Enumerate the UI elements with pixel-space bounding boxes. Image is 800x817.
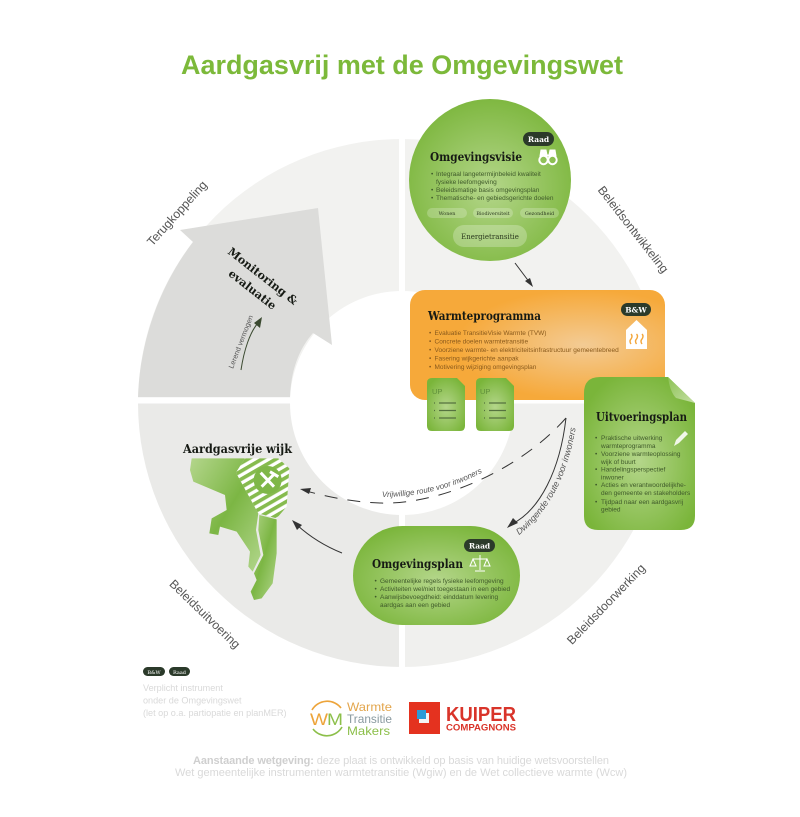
map: aardgasvrije wijk [190,458,289,600]
text: uitvoeringsplan bullets: Voorziene warmteoplossing [601,451,681,458]
arrow: lerend vermogen: Lerend vermogen [226,314,255,370]
text: omgevingsplan bullets: Activiteiten wel/niet toegestaan in een gebied [380,586,510,593]
logo: warmte transitie makers: W [310,710,328,729]
text: omgevingsplan bullets: • [374,578,378,585]
text: warmteprogramma bullets: • [429,338,432,346]
tag: gezondheid [520,208,559,218]
cycle ring [130,130,675,675]
text: uitvoeringsplan bullets: inwoner [601,474,625,482]
text: uitvoeringsplan bullets: • [595,435,598,442]
logo: kuiper compagnons: COMPAGNONS [446,722,516,732]
icon: document UP 1 [427,378,465,431]
badge: raad: Raad [469,541,491,550]
text: warmteprogramma bullets: • [429,347,432,354]
text: warmteprogramma bullets: Evaluatie TransitieVisie Warmte (TVW) [434,330,546,337]
badge: raad legend [169,667,190,676]
text: legend description [143,683,287,718]
label: beleidsdoorwerking: Beleidsdoorwerking [564,561,648,647]
text: omgevingsplan bullets: aardgas aan een gebied [380,602,451,609]
arrow: plan naar wijk [292,520,342,553]
text: omgevingsplan bullets: • [374,594,378,601]
panel: omgevingsvisie [409,99,571,261]
text: aanstaande wetgeving: Wet gemeentelijke instrumenten warmtetransitie (Wgiw) en de Wet collectieve warmte (Wcw) [175,767,627,779]
text: aanstaande wetgeving [175,755,627,779]
text: omgevingsvisie bullets: Thematische- en gebiedsgerichte doelen [436,195,554,202]
heading: omgevingsvisie: Omgevingsvisie [430,149,522,164]
text: warmteprogramma bullets: • [429,330,432,337]
text: warmteprogramma bullets: • [429,364,432,371]
badge: raad legend: Raad [173,670,187,676]
text: omgevingsvisie bullets: • [431,195,434,202]
icon: scales [470,555,490,571]
tag: biodiversiteit: Biodiversiteit [476,211,510,217]
logo: kuiper compagnons [409,702,517,734]
text: warmteprogramma bullets: Fasering wijkgerichte aanpak [434,356,519,362]
text: omgevingsplan bullets: Aanwijsbevoegdheid: einddatum levering [380,594,499,601]
heading: aardgasvrije wijk: Aardgasvrije wijk [182,441,292,456]
badge: raad [464,539,495,552]
badge: b&w legend: B&W [147,670,161,676]
panel: uitvoeringsplan [584,377,695,530]
title: Aardgasvrij met de Omgevingswet [181,50,623,80]
logo: warmte transitie makers: M [327,710,343,729]
icon: binoculars [539,150,557,164]
icon: document UP 2: UP [480,387,490,396]
text: omgevingsplan bullets: • [374,586,378,593]
logo: warmte transitie makers [310,700,392,738]
heading: monitoring en evaluatie: Monitoring & [225,244,301,308]
text: uitvoeringsplan bullets: warmteprogramma [600,443,656,450]
badge: b&w [621,303,651,316]
tag: biodiversiteit [473,208,513,218]
tag: wonen [427,208,467,218]
arrow: vrijwillige route [300,418,566,504]
arrow: monitoring en evaluatie [138,208,332,397]
text: warmteprogramma bullets: • [429,356,432,362]
text: omgevingsvisie bullets [431,171,554,202]
text: warmteprogramma bullets: Motivering wijziging omgevingsplan [434,364,537,371]
text: omgevingsplan bullets: Gemeentelijke regels fysieke leefomgeving [380,578,504,585]
badge: raad [523,132,554,146]
text: uitvoeringsplan bullets: • [595,482,598,489]
logo: warmte transitie makers: Makers [347,724,390,738]
heading: monitoring en evaluatie: evaluatie [226,266,279,313]
heading: warmteprogramma: Warmteprogramma [427,308,541,323]
text: uitvoeringsplan bullets [595,435,691,514]
text: uitvoeringsplan bullets: • [595,466,598,474]
arrow: vrijwillige route: Vrijwillige route voor inwoners [382,469,482,498]
panel: warmteprogramma [410,290,665,400]
text: omgevingsplan bullets [374,578,510,609]
label: beleidsuitvoering: Beleidsuitvoering [167,577,243,651]
arrow: dwingende route: Dwingende route voor inwoners [516,428,576,535]
heading: omgevingsplan: Omgevingsplan [372,556,463,571]
text: uitvoeringsplan bullets: Acties en verantwoordelijkhe- [601,482,686,489]
text: uitvoeringsplan bullets: Tijdpad naar een aardgasvrij [601,499,683,506]
panel: omgevingsplan [353,526,520,625]
text: omgevingsvisie bullets: • [431,187,434,194]
arrow: visie naar warmteprogramma [515,263,533,287]
text: uitvoeringsplan bullets: Praktische uitwerking [601,435,663,442]
icon: pencil [674,431,688,446]
label: beleidsontwikkeling: Beleidsontwikkeling [595,183,671,276]
text: uitvoeringsplan bullets: Handelingsperspectief [601,466,666,474]
legend [143,667,287,718]
text: warmteprogramma bullets: Voorziene warmte- en elektriciteitsinfrastructuur gemeentebreed [434,347,619,354]
text: omgevingsvisie bullets: fysieke leefomgeving [436,179,497,186]
logo: warmte transitie makers: Transitie [347,712,392,726]
badge: b&w legend [143,667,165,676]
tag: energietransitie [453,225,527,247]
text: uitvoeringsplan bullets: wijk of buurt [600,459,636,466]
text: warmteprogramma bullets [429,330,619,371]
text: omgevingsvisie bullets: • [431,171,434,178]
text: legend description: (let op o.a. partiopatie en planMER) [143,708,287,718]
badge: b&w: B&W [625,305,647,314]
text: uitvoeringsplan bullets: den gemeente en stakeholders [601,490,691,497]
logo: warmte transitie makers: Warmte [347,700,392,714]
text: aanstaande wetgeving: Aanstaande wetgeving: deze plaat is ontwikkeld op basis van huidige wetsvoorstellen [193,755,609,767]
text: uitvoeringsplan bullets: • [595,451,598,458]
text: warmteprogramma bullets: Concrete doelen warmtetransitie [434,338,528,346]
text: uitvoeringsplan bullets: • [595,499,598,506]
tag: gezondheid: Gezondheid [525,211,554,217]
tag: energietransitie: Energietransitie [461,233,519,241]
icon: document UP 2 [476,378,514,431]
text: omgevingsvisie bullets: Beleidsmatige basis omgevingsplan [436,187,540,194]
icon: house with heat [626,320,647,349]
heading: uitvoeringsplan: Uitvoeringsplan [596,409,687,424]
text: omgevingsvisie bullets: Integraal langetermijnbeleid kwaliteit [436,171,541,178]
text: legend description: Verplicht instrument [143,683,223,693]
badge: raad: Raad [528,135,550,144]
text: uitvoeringsplan bullets: gebied [601,506,621,514]
label: terugkoppeling: Terugkoppeling [144,178,210,249]
logo: kuiper compagnons: KUIPER [446,704,517,726]
icon: document UP 1: UP [432,387,442,396]
tag: wonen: Wonen [439,211,456,217]
text: legend description: onder de Omgevingswet [143,696,242,706]
